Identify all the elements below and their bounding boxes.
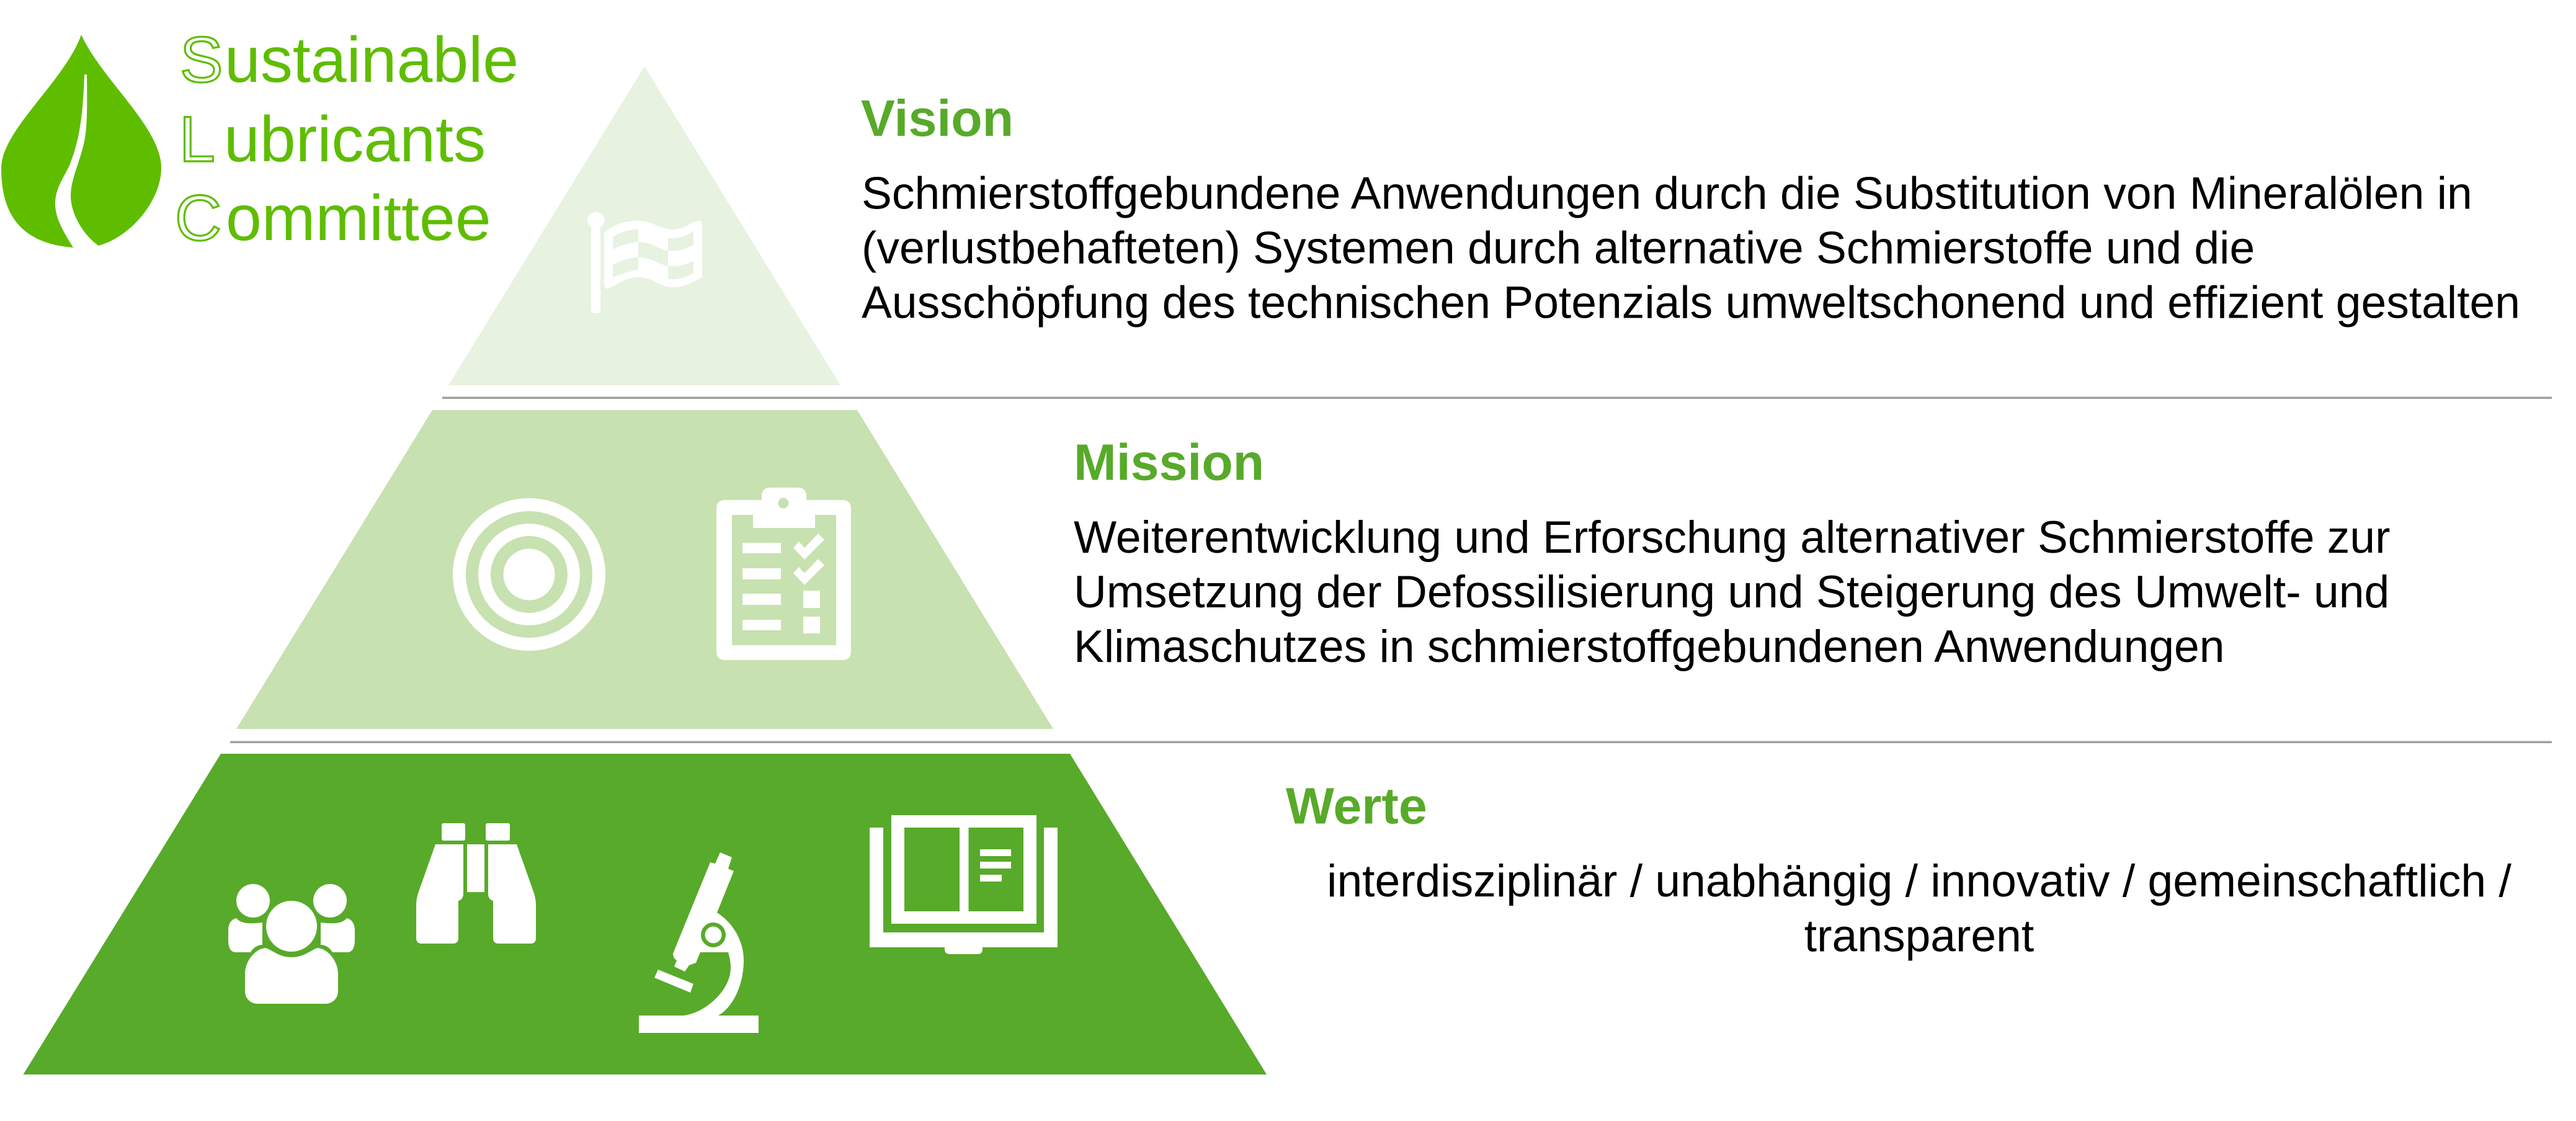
heading: Werte: Werte — [1286, 778, 1427, 835]
icon: people group — [228, 884, 355, 1004]
text block: Mission: Umsetzung der Defossilisierung und Steigerung des Umwelt- und — [1074, 566, 2389, 617]
divider line — [230, 741, 2552, 743]
icon: microscope — [639, 852, 759, 1033]
text block: Vision: Schmierstoffgebundene Anwendungen durch die Substitution von Mineralölen in — [862, 167, 2472, 218]
text block: Werte — [1327, 855, 2511, 962]
text block: Werte: transparent — [1804, 911, 2034, 962]
icon: open book — [870, 815, 1058, 954]
panel: Mission pyramid middle — [236, 410, 1053, 729]
icon: leaf drop — [1, 35, 161, 248]
heading: Mission: Mission — [1074, 434, 1264, 491]
text: Committee: ommittee — [226, 182, 491, 254]
text block: Vision: (verlustbehafteten) Systemen durch alternative Schmierstoffe und die — [862, 222, 2255, 273]
icon: target — [453, 498, 605, 651]
panel: Werte pyramid base — [24, 754, 1267, 1074]
divider line — [442, 397, 2552, 399]
icon: binoculars — [416, 823, 536, 944]
icon: flag — [587, 212, 702, 313]
icon: clipboard checklist — [716, 488, 851, 660]
text: Lubricants: ubricants — [224, 104, 486, 176]
text: Committee: C — [175, 182, 221, 254]
icon detail: flag checks — [613, 230, 693, 279]
text: Sustainable: S — [180, 24, 223, 96]
text block: Vision — [862, 167, 2520, 328]
text block: Vision: Ausschöpfung des technischen Potenzials umweltschonend und effizient gestalten — [862, 277, 2520, 328]
text block: Mission: Klimaschutzes in schmierstoffgebundenen Anwendungen — [1074, 621, 2225, 672]
text: Sustainable: ustainable — [225, 24, 519, 96]
heading: Vision: Vision — [861, 90, 1014, 147]
text block: Mission: Weiterentwicklung und Erforschung alternativer Schmierstoffe zur — [1074, 512, 2391, 563]
text block: Mission — [1074, 512, 2391, 672]
panel: Vision pyramid tip — [448, 66, 840, 385]
text: Lubricants: L — [179, 104, 215, 176]
logo: Sustainable Lubricants Committee — [1, 24, 519, 254]
text block: Werte: interdisziplinär / unabhängig / innovativ / gemeinschaftlich / — [1327, 855, 2511, 906]
